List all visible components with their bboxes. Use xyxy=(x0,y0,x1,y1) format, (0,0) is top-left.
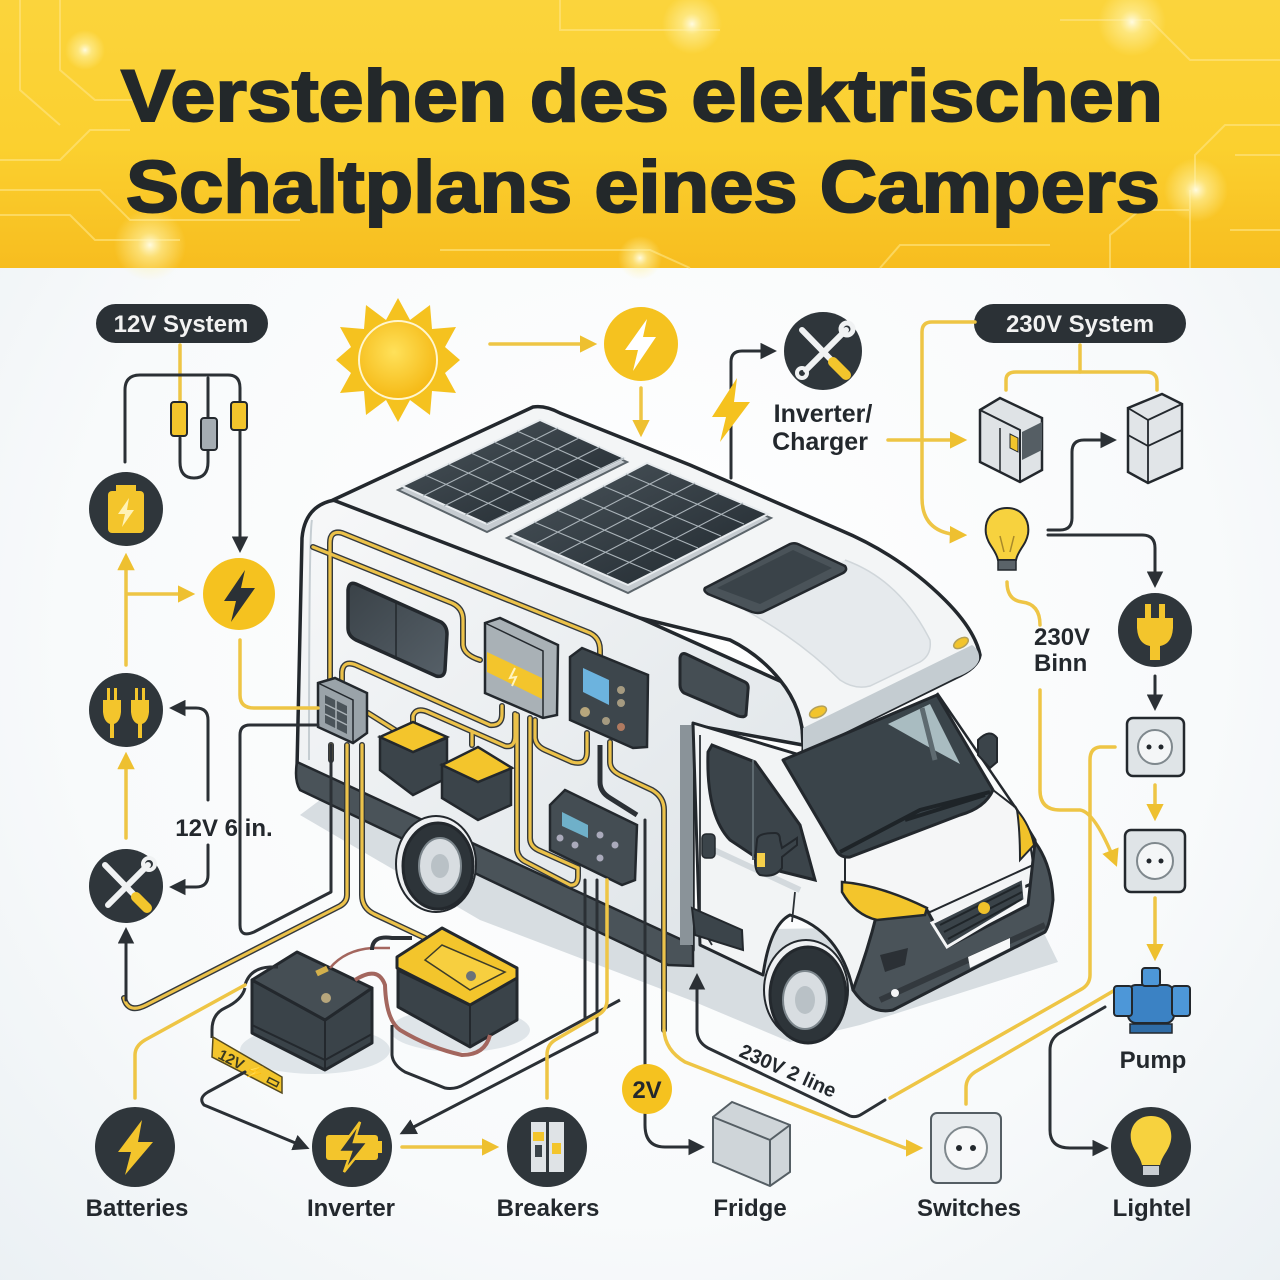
icon: bolt beside inverter xyxy=(712,378,750,442)
camper van xyxy=(124,407,1053,1043)
side mirror right xyxy=(978,733,997,768)
lower control panel xyxy=(550,790,637,885)
2V badge: 2V xyxy=(632,1077,662,1104)
230V wiring, yellow xyxy=(888,322,1157,1104)
camper side wall xyxy=(297,500,803,950)
licence plate xyxy=(968,938,1010,968)
alcove underside xyxy=(803,645,979,753)
side indicator xyxy=(1017,810,1034,860)
lower skirt xyxy=(296,762,693,966)
black wire xyxy=(600,745,637,815)
rear wheel xyxy=(396,816,476,912)
wall battery 1 xyxy=(380,722,447,795)
icon: socket upper xyxy=(1127,718,1184,776)
arrow: camper to inverter charger xyxy=(731,351,772,478)
headlight xyxy=(842,882,927,920)
door handle xyxy=(702,834,715,858)
bumper xyxy=(853,842,1053,1011)
icon: plugs xyxy=(89,673,163,747)
A-pillar xyxy=(937,693,1015,807)
yellow service battery xyxy=(390,928,530,1052)
door window xyxy=(708,745,815,880)
icon: pump xyxy=(1114,968,1190,1033)
left arrows xyxy=(126,558,331,1000)
12V system label xyxy=(96,304,268,343)
charge controller xyxy=(485,618,558,718)
icon: battery xyxy=(89,472,163,546)
control panel xyxy=(570,648,648,748)
node: light: Lightel xyxy=(1113,1195,1191,1222)
node: batteries: Batteries xyxy=(86,1195,188,1222)
icon: socket lower xyxy=(1125,830,1185,892)
roof xyxy=(333,407,980,753)
12V system label: 12V System xyxy=(114,311,248,338)
inverter charger label xyxy=(772,400,872,456)
node: breakers xyxy=(497,1107,599,1222)
230V system label xyxy=(974,304,1186,343)
front wheel xyxy=(764,940,848,1043)
side mirror left xyxy=(755,833,797,876)
icon: circuit breaker xyxy=(980,398,1042,482)
alcove window xyxy=(680,654,748,717)
camper ground shadow xyxy=(300,800,1058,1042)
icon: fridge xyxy=(1128,394,1182,483)
marker lights xyxy=(808,704,828,720)
windshield xyxy=(783,695,993,857)
230V wiring, black xyxy=(1048,440,1155,1148)
bottom wiring xyxy=(135,820,918,1148)
node: switches xyxy=(917,1113,1021,1222)
230V Binn label xyxy=(1034,624,1090,677)
node: light xyxy=(1111,1107,1191,1222)
pump label: Pump xyxy=(1120,1047,1186,1074)
dark starter battery xyxy=(240,952,390,1074)
title xyxy=(121,56,1163,228)
title: Schaltplans eines Campers xyxy=(126,147,1160,228)
battery cables xyxy=(212,938,620,1088)
fuses xyxy=(171,402,247,450)
inverter charger label: Charger xyxy=(772,428,868,456)
node: batteries xyxy=(86,1107,188,1222)
230V system label: 230V System xyxy=(1006,311,1154,338)
wall battery 2 xyxy=(442,747,512,820)
sun icon xyxy=(336,298,460,422)
inverter charger label: Inverter/ xyxy=(774,400,872,428)
icon: yellow bolt node xyxy=(203,558,275,630)
side window xyxy=(348,583,447,676)
230V 2 line label: 230V 2 line xyxy=(736,1040,839,1103)
12V fuse wiring xyxy=(125,345,240,548)
cab body xyxy=(693,723,1040,990)
230V Binn label: 230V xyxy=(1034,624,1090,651)
solar panel 1 xyxy=(398,420,627,532)
12V label: 12V 6 in. xyxy=(175,815,273,842)
header banner xyxy=(0,0,1280,281)
solar panel 2 xyxy=(507,463,771,593)
grille xyxy=(932,878,1025,947)
skylight xyxy=(704,543,846,613)
12V battery tag: 12V ⚡ ▭ xyxy=(215,1046,284,1092)
node: fridge: Fridge xyxy=(713,1195,787,1222)
node: breakers: Breakers xyxy=(497,1195,599,1222)
icon: plug right xyxy=(1118,593,1192,667)
icon: light bulb xyxy=(986,508,1028,570)
icon: solar bolt xyxy=(604,307,678,381)
230V Binn label: Binn xyxy=(1034,650,1087,677)
node: fridge xyxy=(713,1102,790,1222)
icon: tools xyxy=(784,312,862,390)
title: Verstehen des elektrischen xyxy=(121,56,1163,137)
node: inverter: Inverter xyxy=(307,1195,395,1222)
arrow: sun to charge icon xyxy=(490,342,592,346)
2V badge xyxy=(622,1064,672,1114)
node: switches: Switches xyxy=(917,1195,1021,1222)
camper wiring xyxy=(124,532,664,1030)
fuse box xyxy=(318,678,367,743)
arrow: charge to roof xyxy=(639,388,643,432)
node: inverter xyxy=(307,1107,395,1222)
icon: wrench and screwdriver xyxy=(89,849,163,923)
